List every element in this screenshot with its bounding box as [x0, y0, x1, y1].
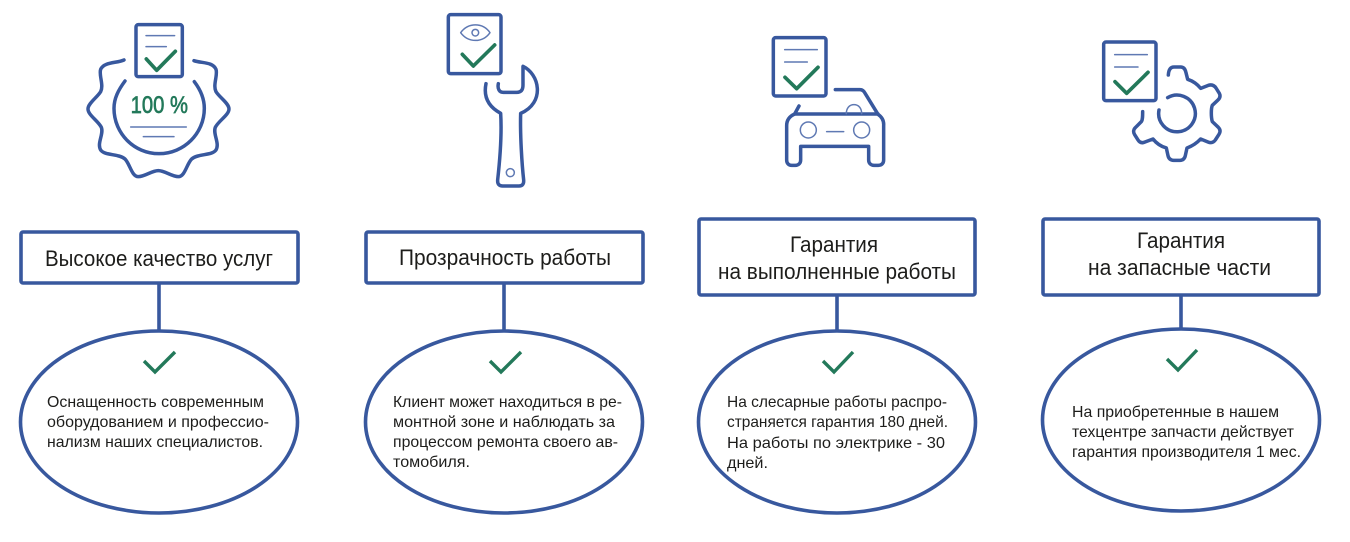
column 2: transparency — [366, 232, 643, 513]
body text 2: томобиля. — [393, 454, 470, 471]
icon: car with document — [773, 38, 884, 165]
heading box 1 — [21, 232, 298, 283]
body text 2: монтной зоне и наблюдать за — [393, 414, 615, 431]
body text 3: На слесарные работы распро- — [727, 394, 947, 411]
heading box 4: Гарантия — [1137, 228, 1225, 253]
check mark 4 — [1167, 350, 1197, 370]
body text 4: гарантия производителя 1 мес. — [1072, 444, 1301, 461]
heading box 2: Прозрачность работы — [399, 245, 611, 270]
column 1: quality — [20, 232, 298, 513]
heading box 4: на запасные части — [1088, 255, 1271, 280]
heading box 1: Высокое качество услуг — [45, 246, 273, 271]
body text 3: дней. — [727, 455, 768, 472]
heading box 3: Гарантия — [790, 232, 878, 257]
body text 1: нализм наших специалистов. — [47, 434, 263, 451]
ellipse panel 1 — [20, 331, 298, 513]
body text 2: Клиент может находиться в ре- — [393, 394, 622, 411]
body text 2 — [393, 394, 622, 471]
icon: gear with document — [1104, 42, 1220, 160]
connector 2 — [502, 283, 506, 332]
body text 3: страняется гарантия 180 дней. — [727, 414, 948, 431]
body text 3 — [727, 394, 948, 472]
heading box 4 — [1043, 219, 1319, 295]
check mark 2 — [490, 352, 521, 372]
heading box 3 — [699, 219, 975, 295]
connector 1 — [157, 283, 161, 332]
column 4: parts warranty — [1042, 219, 1320, 511]
check mark 3 — [823, 352, 853, 372]
body text 4 — [1072, 404, 1301, 461]
column 3: work warranty — [698, 219, 976, 513]
body text 3: На работы по электрике - 30 — [727, 435, 945, 452]
body text 2: процессом ремонта своего ав- — [393, 434, 618, 451]
ellipse panel 4 — [1042, 329, 1320, 511]
icon: quality badge with document: 100 % — [131, 92, 188, 119]
ellipse panel 2 — [366, 331, 642, 513]
body text 4: техцентре запчасти действует — [1072, 424, 1294, 441]
heading box 2 — [366, 232, 643, 283]
connector 3 — [835, 295, 839, 332]
heading box 3: на выполненные работы — [718, 259, 956, 284]
body text 1: оборудованием и профессио- — [47, 414, 269, 431]
ellipse panel 3 — [698, 331, 976, 513]
icon: wrench with eye document — [448, 15, 537, 186]
body text 1 — [47, 394, 269, 451]
icon: quality badge with document — [88, 25, 229, 177]
body text 4: На приобретенные в нашем — [1072, 404, 1279, 421]
body text 1: Оснащенность современным — [47, 394, 264, 411]
connector 4 — [1179, 295, 1183, 330]
check mark 1 — [144, 352, 175, 372]
